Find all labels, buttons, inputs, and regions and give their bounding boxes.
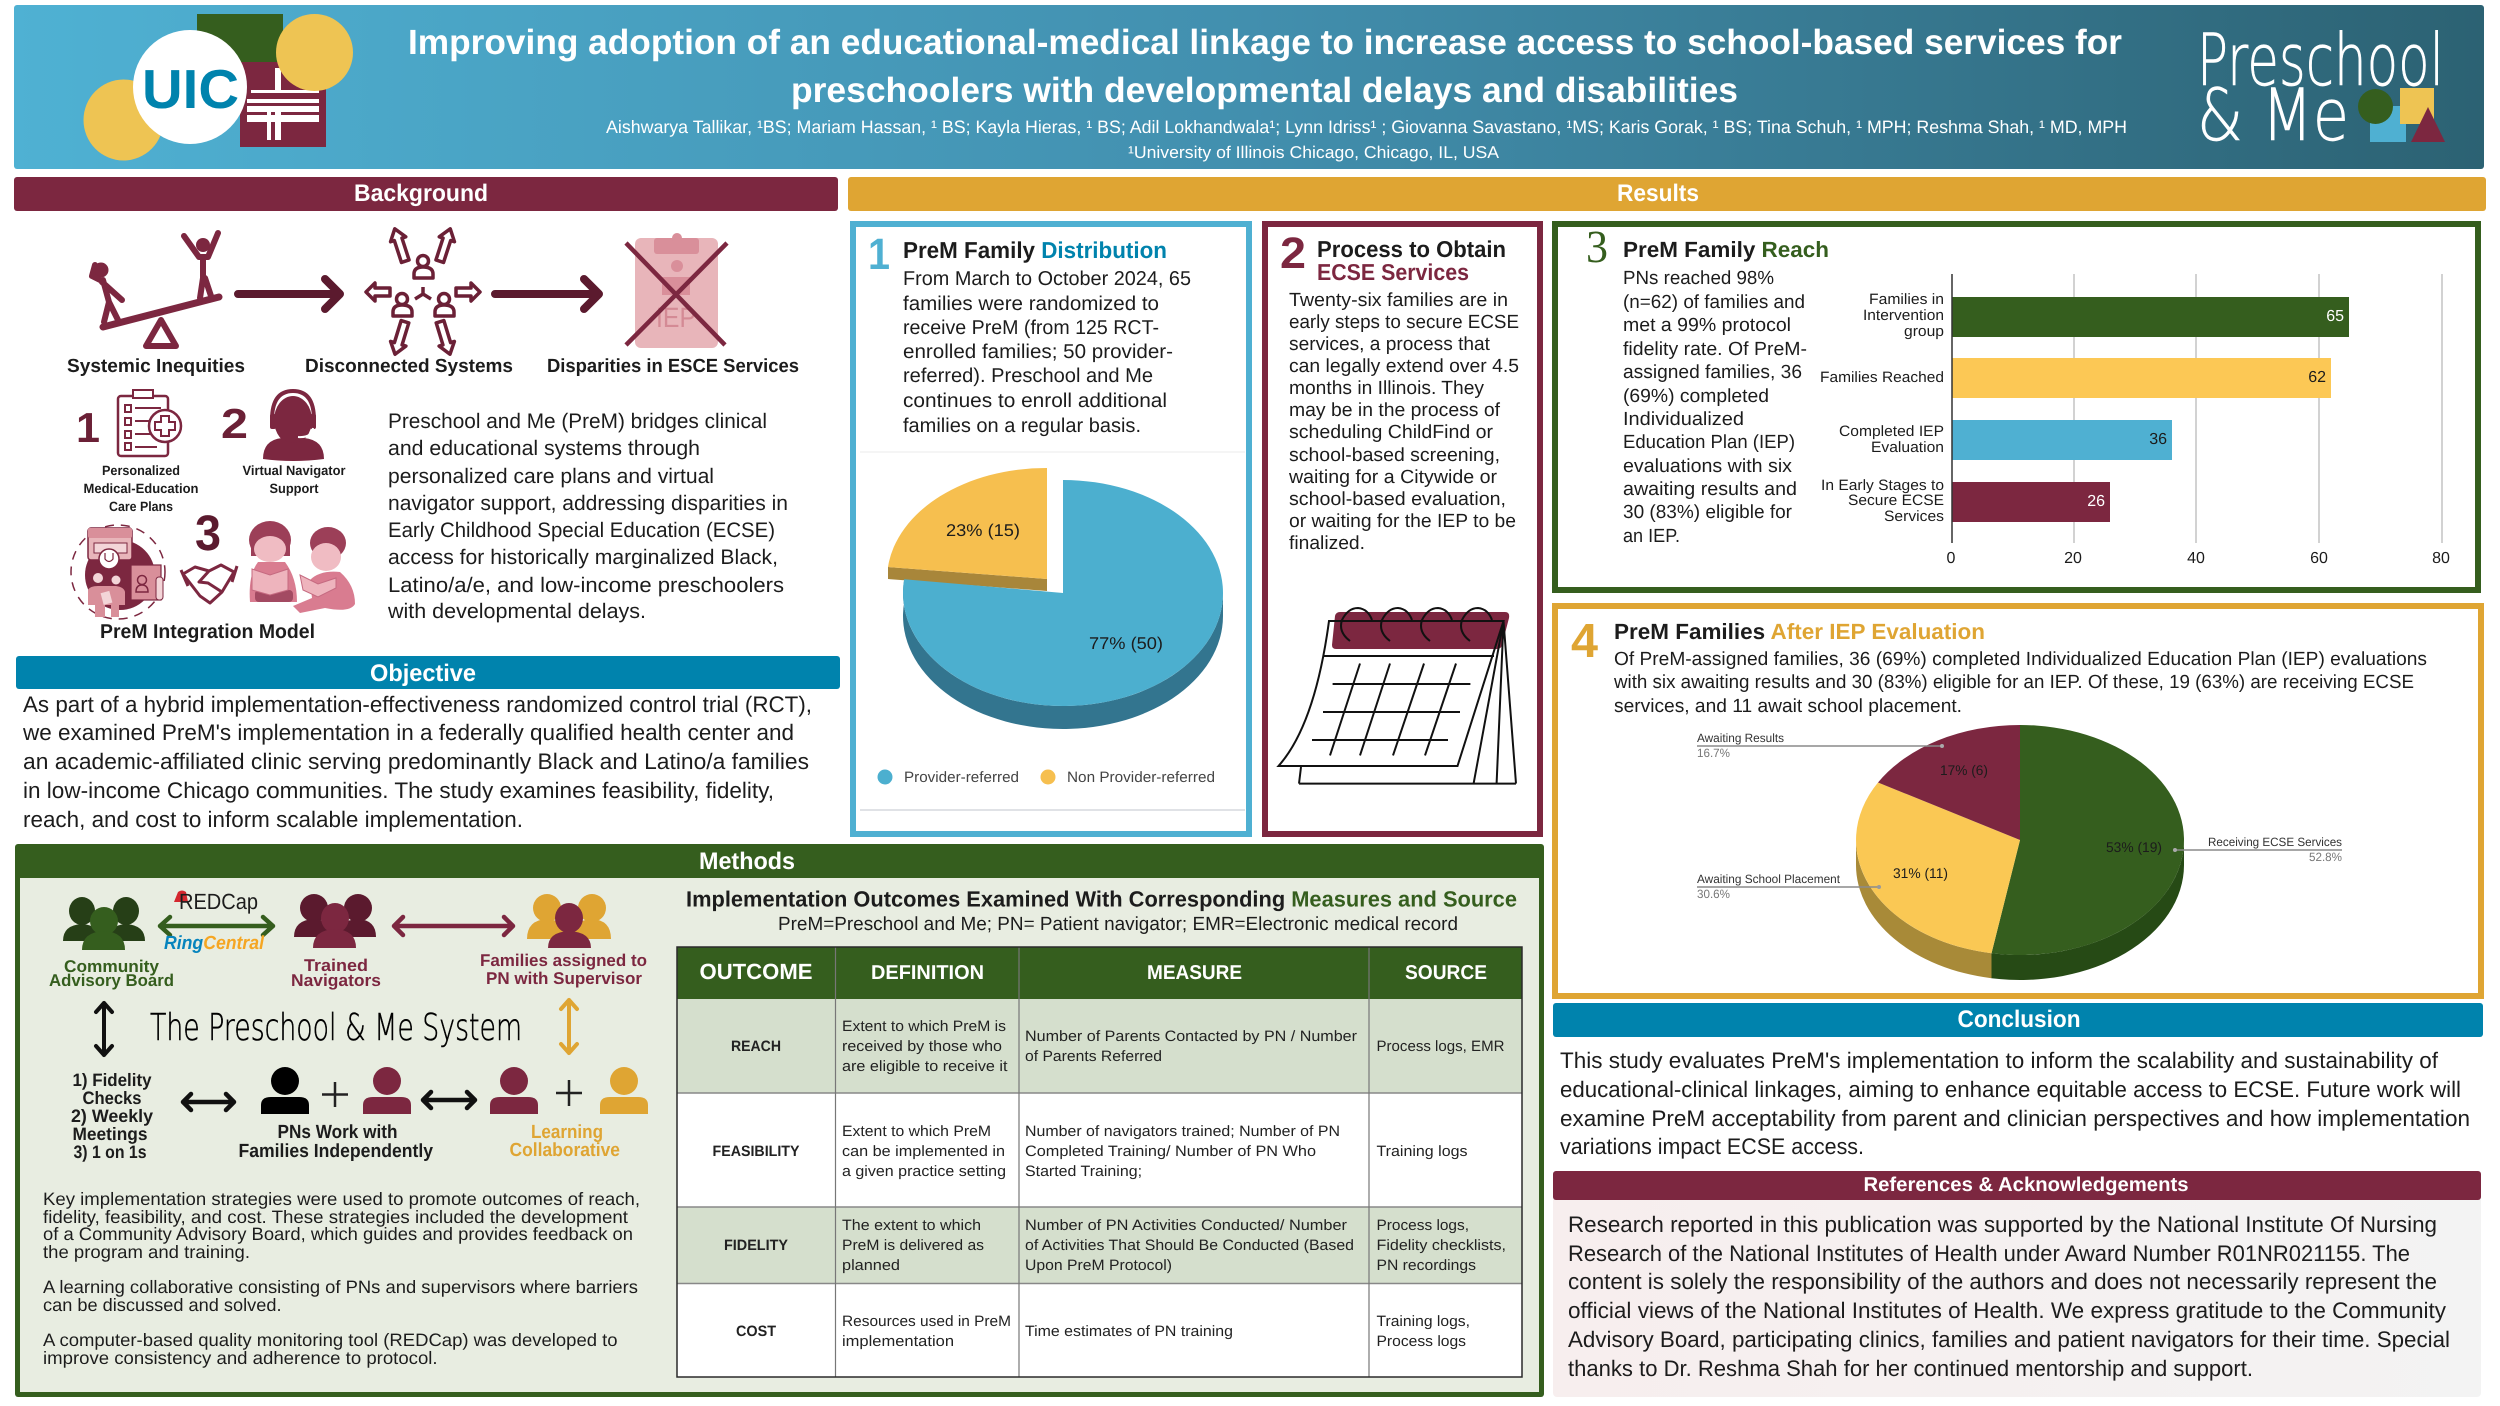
text: objective: [22, 692, 812, 832]
model item 3: integration model: PreM Integration Model: [100, 621, 315, 643]
authors: Aishwarya Tallikar, ¹BS; Mariam Hassan, ¹ BS; Kayla Hieras, ¹ BS; Adil Lokhandwala¹; Lynn Idriss¹ ; Giovanna Savastano, ¹MS; Karis Gorak, ¹ BS; Tina Schuh, ¹ MPH; Reshma Shah, ¹ MD, MPH: [606, 117, 2127, 137]
pie chart: referral: Non Provider-referred: [1067, 769, 1215, 786]
icon: clipboard IEP crossed out: IEP: [656, 302, 696, 333]
pie chart: after IEP evaluation: 53% (19): [2106, 839, 2162, 855]
bar chart: family reach: 0: [1947, 550, 1956, 567]
table: outcomes, definitions, measures, sources: DEFINITION: [871, 962, 984, 984]
panel 3: family reach: 3: [1586, 221, 1608, 272]
list: fidelity checks: 1) Fidelity: [72, 1070, 152, 1090]
text: references: Research reported in this publication was supported by the National Institute Of Nursing: [1568, 1212, 2437, 1237]
group: PNs work with families: PNs Work with: [278, 1122, 398, 1143]
text: finalized.: [1289, 533, 1365, 554]
text: school-based evaluation,: [1289, 489, 1506, 510]
text: implementation strategies: Key implementation strategies were used to promote outcomes of reach,: [43, 1189, 640, 1209]
text: 30 (83%) eligible for: [1623, 502, 1793, 523]
group: learning collaborative: Collaborative: [510, 1140, 620, 1161]
text: implementation strategies: improve consistency and adherence to protocol.: [43, 1348, 438, 1368]
arrow: [238, 279, 340, 309]
text: months in Illinois. They: [1289, 378, 1485, 399]
table heading: Implementation Outcomes Examined With Corresponding Measures and Source: [686, 886, 1517, 912]
diagram: preschool and me system: [49, 889, 648, 1162]
group: trained navigators: Trained: [304, 956, 368, 975]
text: or waiting for the IEP to be: [1289, 511, 1516, 532]
icon: systemic inequities seesaw: [92, 233, 219, 346]
bar chart: family reach: Families Reached: [1820, 369, 1944, 386]
text: references: thanks to Dr. Reshma Shah for her continued mentorship and support.: [1568, 1356, 2253, 1381]
list: fidelity checks: Checks: [82, 1088, 142, 1108]
title: preschoolers with developmental delays and disabilities: [791, 71, 1738, 110]
text: [903, 268, 1191, 437]
pie chart: referral: 23% (15): [946, 521, 1020, 540]
bar chart: family reach: Services: [1884, 508, 1944, 525]
bar chart: family reach: 36: [2149, 431, 2167, 448]
labels: three stage row: Systemic Inequities: [67, 356, 245, 377]
panel 2: process to obtain services: [1265, 224, 1540, 834]
labels: three stage row: [67, 356, 799, 377]
heading: conclusion: Conclusion: [1958, 1006, 2080, 1033]
header banner: [14, 5, 2484, 169]
heading: references: References & Acknowledgements: [1864, 1174, 2188, 1196]
text: references: Research of the National Institutes of Health under Award Number R01NR021155. The: [1568, 1241, 2410, 1266]
bar chart: family reach: 80: [2432, 550, 2450, 567]
group: families assigned: Families assigned to: [480, 951, 647, 970]
text: waiting for a Citywide or: [1288, 467, 1498, 488]
text: Individualized: [1623, 409, 1744, 430]
table: outcomes, definitions, measures, sources: SOURCE: [1405, 962, 1487, 984]
heading: objective: Objective: [370, 660, 476, 687]
table: outcomes, definitions, measures, sources: planned: [842, 1257, 900, 1274]
panel 4: after IEP evaluation: [1555, 606, 2481, 996]
model item 1: care plans: [76, 390, 198, 514]
icon: clipboard IEP crossed out: [626, 233, 727, 348]
pie chart: after IEP evaluation: [1697, 725, 2342, 980]
list: fidelity checks: 3) 1 on 1s: [74, 1142, 146, 1162]
table: outcomes, definitions, measures, sources: Extent to which PreM is: [842, 1018, 1006, 1035]
table: outcomes, definitions, measures, sources: Fidelity checklists,: [1376, 1237, 1506, 1254]
table: outcomes, definitions, measures, sources: Number of Parents Contacted by PN / Number: [1025, 1028, 1357, 1045]
table heading: PreM=Preschool and Me; PN= Patient navigator; EMR=Electronic medical record: [778, 914, 1458, 935]
heading: objective: [16, 656, 840, 689]
icon: calendar: [1278, 608, 1516, 784]
pie chart: after IEP evaluation: Receiving ECSE Services: [2208, 835, 2342, 849]
pie chart: after IEP evaluation: Awaiting Results: [1697, 731, 1784, 745]
icon: integration circle: [71, 525, 165, 619]
heading: PreM Family Distribution: [903, 237, 1167, 263]
text: families on a regular basis.: [903, 415, 1141, 437]
text: implementation strategies: A learning collaborative consisting of PNs and supervisors where barriers: [43, 1277, 638, 1297]
heading: PreM Family Reach: [1623, 237, 1829, 262]
table: outcomes, definitions, measures, sources: PreM is delivered as: [842, 1237, 984, 1254]
text: services, a process that: [1289, 334, 1491, 355]
text: implementation strategies: [43, 1189, 640, 1368]
arrow: [183, 1094, 234, 1110]
text: conclusion: variations impact ECSE access.: [1560, 1134, 1864, 1159]
arrow: [394, 917, 513, 935]
text: objective: As part of a hybrid implementation-effectiveness randomized control trial (RCT),: [23, 692, 812, 717]
bar chart: family reach: Families in: [1869, 291, 1944, 308]
heading: results: Results: [1617, 180, 1699, 207]
text: services, and 11 await school placement.: [1614, 696, 1962, 717]
group: learning collaborative: [490, 1067, 648, 1161]
text: early steps to secure ECSE: [1289, 312, 1519, 333]
heading: background: Background: [354, 180, 488, 207]
text: [1613, 649, 2427, 717]
pie chart: referral: 77% (50): [1089, 634, 1163, 653]
text: implementation strategies: of a Community Advisory Board, which guides and provides feedback on: [43, 1224, 633, 1244]
panel 4: after IEP evaluation: 4: [1571, 615, 1598, 668]
panel 2: process to obtain services: 2: [1280, 229, 1306, 278]
icon: children reading: [249, 521, 355, 613]
text: implementation strategies: A computer-based quality monitoring tool (REDCap) was developed to: [43, 1330, 618, 1350]
arrow: [495, 279, 599, 309]
logo: Preschool and Me: [2197, 18, 2445, 157]
table: outcomes, definitions, measures, sources: Time estimates of PN training: [1025, 1323, 1233, 1340]
arrow and tools: REDCap, RingCentral: RingCentral: [164, 933, 265, 954]
text: enrolled families; 50 provider-: [903, 341, 1173, 363]
model item 1: care plans: Medical-Education: [84, 481, 198, 496]
table: outcomes, definitions, measures, sources: received by those who: [842, 1038, 1002, 1055]
table: outcomes, definitions, measures, sources: Upon PreM Protocol): [1025, 1257, 1172, 1274]
text: met a 99% protocol: [1623, 315, 1791, 336]
group: families assigned: PN with Supervisor: [486, 969, 642, 988]
text: (69%) completed: [1623, 386, 1769, 407]
bar chart: family reach: [1820, 274, 2450, 567]
pie chart: after IEP evaluation: 31% (11): [1893, 865, 1948, 881]
model item 2: virtual navigator: Support: [270, 481, 319, 496]
group: community advisory board: Advisory Board: [49, 971, 174, 990]
heading: methods: Methods: [699, 848, 795, 875]
model item 1: care plans: Care Plans: [109, 499, 173, 514]
list: fidelity checks: 2) Weekly: [71, 1106, 153, 1126]
text: evaluations with six: [1623, 456, 1793, 477]
text: Of PreM-assigned families, 36 (69%) completed Individualized Education Plan (IEP) evaluations: [1614, 649, 2427, 670]
text: (n=62) of families and: [1623, 292, 1805, 313]
bar chart: family reach: Completed IEP: [1839, 423, 1944, 440]
table: outcomes, definitions, measures, sources: OUTCOME: [700, 959, 812, 984]
bar chart: family reach: Evaluation: [1871, 439, 1944, 456]
labels: three stage row: Disparities in ESCE Services: [547, 356, 799, 377]
table: outcomes, definitions, measures, sources: Completed Training/ Number of PN Who: [1025, 1143, 1316, 1160]
handwritten system title: The Preschool & Me System: [150, 1006, 522, 1049]
text: with six awaiting results and 30 (83%) eligible for an IEP. Of these, 19 (63%) are receiving ECSE: [1613, 672, 2414, 693]
text: background description: [387, 410, 788, 623]
model item 2: virtual navigator: Virtual Navigator: [242, 463, 346, 478]
bar chart: family reach: 60: [2310, 550, 2328, 567]
text: implementation strategies: fidelity, feasibility, and cost. These strategies included the development: [43, 1207, 628, 1227]
heading: Process to Obtain: [1317, 236, 1506, 262]
table: outcomes, definitions, measures, sources: Process logs,: [1376, 1217, 1469, 1234]
table: outcomes, definitions, measures, sources: Training logs: [1376, 1143, 1468, 1160]
text: [1623, 268, 1807, 547]
table: outcomes, definitions, measures, sources: Number of PN Activities Conducted/ Number: [1025, 1217, 1347, 1234]
text: continues to enroll additional: [903, 390, 1167, 412]
title: Improving adoption of an educational-medical linkage to increase access to school-based services for: [408, 23, 2122, 62]
panel: background: [14, 177, 838, 643]
text: background description: Preschool and Me (PreM) bridges clinical: [388, 410, 767, 433]
group: community advisory board: Community: [64, 957, 160, 976]
table: outcomes, definitions, measures, sources: can be implemented in: [842, 1143, 1005, 1160]
model item 1: care plans: Personalized: [102, 463, 180, 478]
text: an IEP.: [1623, 526, 1680, 547]
table: outcomes, definitions, measures, sources: are eligible to receive it: [842, 1058, 1008, 1075]
panel 1: family distribution: 1: [868, 230, 890, 279]
heading: references: [1553, 1171, 2481, 1200]
text: references: [1568, 1212, 2450, 1381]
text: conclusion: This study evaluates PreM's implementation to inform the scalability and sustainability of: [1560, 1048, 2439, 1073]
model item 3: integration model: [71, 505, 355, 643]
text: objective: reach, and cost to inform scalable implementation.: [23, 807, 523, 832]
table: outcomes, definitions, measures, sources: a given practice setting: [842, 1163, 1006, 1180]
group: learning collaborative: Learning: [531, 1122, 603, 1143]
bar chart: family reach: 62: [2308, 369, 2326, 386]
text: conclusion: [1560, 1048, 2470, 1159]
table: outcomes, definitions, measures, sources: Number of navigators trained; Number of PN: [1025, 1123, 1340, 1140]
panel: conclusion: [1553, 1003, 2483, 1159]
text: families were randomized to: [903, 293, 1159, 315]
text: background description: and educational systems through: [388, 437, 700, 460]
bar chart: family reach: In Early Stages to: [1821, 477, 1944, 494]
text: references: content is solely the responsibility of the authors and does not necessarily represent the: [1568, 1269, 2437, 1294]
panel: methods: [15, 844, 1544, 1397]
text: objective: in low-income Chicago communities. The study examines feasibility, fidelity,: [23, 778, 774, 803]
bar chart: family reach: 40: [2187, 550, 2205, 567]
title: [408, 23, 2122, 110]
pie chart: after IEP evaluation: 17% (6): [1940, 762, 1988, 778]
pie chart: after IEP evaluation: 30.6%: [1697, 887, 1730, 901]
table heading: [686, 886, 1517, 935]
group: community advisory board: [49, 897, 174, 990]
text: may be in the process of: [1289, 400, 1501, 421]
pie chart: referral: Provider-referred: [904, 769, 1019, 786]
arrow: [96, 1003, 112, 1055]
bar chart: family reach: 26: [2087, 493, 2105, 510]
heading: [1317, 236, 1506, 285]
group: PNs work with families: [238, 1067, 433, 1162]
arrow: [561, 1000, 577, 1053]
table: outcomes, definitions, measures, sources: Started Training;: [1025, 1163, 1142, 1180]
bar chart: family reach: 65: [2326, 308, 2344, 325]
table: outcomes, definitions, measures, sources: Extent to which PreM: [842, 1123, 991, 1140]
text: background description: navigator support, addressing disparities in: [388, 492, 788, 515]
text: objective: an academic-affiliated clinic serving predominantly Black and Latino/a families: [23, 749, 809, 774]
text: Education Plan (IEP): [1623, 432, 1795, 453]
logo: UIC: [84, 14, 353, 160]
model item 2: virtual navigator: 2: [221, 400, 248, 447]
authors: ¹University of Illinois Chicago, Chicago, IL, USA: [1128, 143, 1500, 162]
text: scheduling ChildFind or: [1289, 422, 1494, 443]
arrow and tools: REDCap, RingCentral: REDCap: [179, 889, 258, 914]
table: outcomes, definitions, measures, sources: Training logs,: [1376, 1313, 1470, 1330]
table: outcomes, definitions, measures, sources: Resources used in PreM: [842, 1313, 1011, 1330]
text: PNs reached 98%: [1623, 268, 1774, 289]
icon: handshake: [181, 565, 237, 603]
pie chart: after IEP evaluation: 52.8%: [2309, 850, 2342, 864]
table: outcomes, definitions, measures, sources: [677, 947, 1522, 1377]
text: assigned families, 36: [1623, 362, 1802, 383]
table: outcomes, definitions, measures, sources: implementation: [842, 1333, 954, 1350]
text: conclusion: examine PreM acceptability from parent and clinician perspectives and how implementation: [1560, 1106, 2470, 1131]
text: can legally extend over 4.5: [1289, 356, 1519, 377]
panel 3: family reach: [1555, 221, 2478, 590]
group: trained navigators: Navigators: [291, 971, 381, 990]
model item 3: integration model: 3: [195, 505, 221, 561]
text: implementation strategies: can be discussed and solved.: [43, 1295, 282, 1315]
table: outcomes, definitions, measures, sources: The extent to which: [842, 1217, 981, 1234]
panel: references and acknowledgements: [1553, 1171, 2481, 1397]
logo: Preschool and Me: & Me: [2197, 73, 2349, 157]
model item 1: care plans: 1: [76, 404, 100, 451]
table: outcomes, definitions, measures, sources: REACH: [731, 1038, 781, 1055]
table: outcomes, definitions, measures, sources: Process logs, EMR: [1376, 1038, 1505, 1055]
text: background description: personalized care plans and virtual: [388, 465, 714, 488]
bar chart: family reach: group: [1904, 323, 1944, 340]
heading: conclusion: [1553, 1003, 2483, 1037]
pie chart: referral: [860, 452, 1245, 810]
text: background description: with developmental delays.: [387, 600, 646, 623]
table: outcomes, definitions, measures, sources: of Parents Referred: [1025, 1048, 1162, 1065]
text: background description: Latino/a/e, and low-income preschoolers: [388, 574, 784, 597]
table: outcomes, definitions, measures, sources: of Activities That Should Be Conducted (Based: [1025, 1237, 1354, 1254]
heading: ECSE Services: [1317, 259, 1469, 285]
pie chart: after IEP evaluation: Awaiting School Placement: [1697, 872, 1841, 886]
labels: three stage row: Disconnected Systems: [305, 356, 513, 377]
text: conclusion: educational-clinical linkages, aiming to enhance equitable access to ECSE. Future work will: [1560, 1077, 2461, 1102]
arrow: [423, 1092, 475, 1108]
table: outcomes, definitions, measures, sources: Process logs: [1376, 1333, 1466, 1350]
text: implementation strategies: the program and training.: [43, 1242, 250, 1262]
bar chart: family reach: Secure ECSE: [1848, 492, 1944, 509]
heading: background: [14, 177, 838, 211]
text: background description: Early Childhood Special Education (ECSE): [388, 519, 775, 542]
heading: results: [848, 177, 2486, 211]
group: PNs work with families: Families Independently: [238, 1141, 433, 1162]
panel: objective: [16, 656, 840, 832]
table: outcomes, definitions, measures, sources: COST: [736, 1323, 776, 1340]
bar chart: family reach: 20: [2064, 550, 2082, 567]
text: Twenty-six families are in: [1289, 290, 1508, 311]
text: From March to October 2024, 65: [903, 268, 1191, 290]
list: fidelity checks: [71, 1070, 153, 1162]
group: trained navigators: [291, 894, 381, 990]
text: school-based screening,: [1289, 445, 1500, 466]
model item 2: virtual navigator: [221, 391, 346, 496]
bar chart: family reach: Intervention: [1863, 307, 1944, 324]
text: references: Advisory Board, participating clinics, families and patient navigators for their time. Special: [1568, 1327, 2450, 1352]
table: outcomes, definitions, measures, sources: PN recordings: [1376, 1257, 1476, 1274]
logo: UIC: UIC: [142, 58, 239, 120]
text: references: official views of the National Institutes of Health. We express gratitude to the Community: [1568, 1298, 2447, 1323]
heading: PreM Families After IEP Evaluation: [1614, 619, 1985, 644]
arrow and tools: REDCap, RingCentral: [160, 889, 273, 954]
table: outcomes, definitions, measures, sources: FEASIBILITY: [712, 1143, 800, 1160]
table: outcomes, definitions, measures, sources: FIDELITY: [724, 1237, 788, 1254]
text: receive PreM (from 125 RCT-: [903, 317, 1159, 339]
text: objective: we examined PreM's implementation in a federally qualified health center and: [22, 720, 794, 745]
text: [1288, 290, 1519, 554]
authors: [606, 117, 2127, 162]
pie chart: after IEP evaluation: 16.7%: [1697, 746, 1730, 760]
text: background description: access for historically marginalized Black,: [388, 546, 778, 569]
icon: disconnected systems: [366, 226, 480, 357]
list: fidelity checks: Meetings: [72, 1124, 148, 1144]
table: outcomes, definitions, measures, sources: MEASURE: [1147, 962, 1242, 984]
text: awaiting results and: [1623, 479, 1797, 500]
text: fidelity rate. Of PreM-: [1623, 339, 1807, 360]
panel 1: family distribution: [853, 224, 1249, 834]
text: referred). Preschool and Me: [903, 365, 1153, 387]
group: families assigned: [480, 894, 647, 988]
